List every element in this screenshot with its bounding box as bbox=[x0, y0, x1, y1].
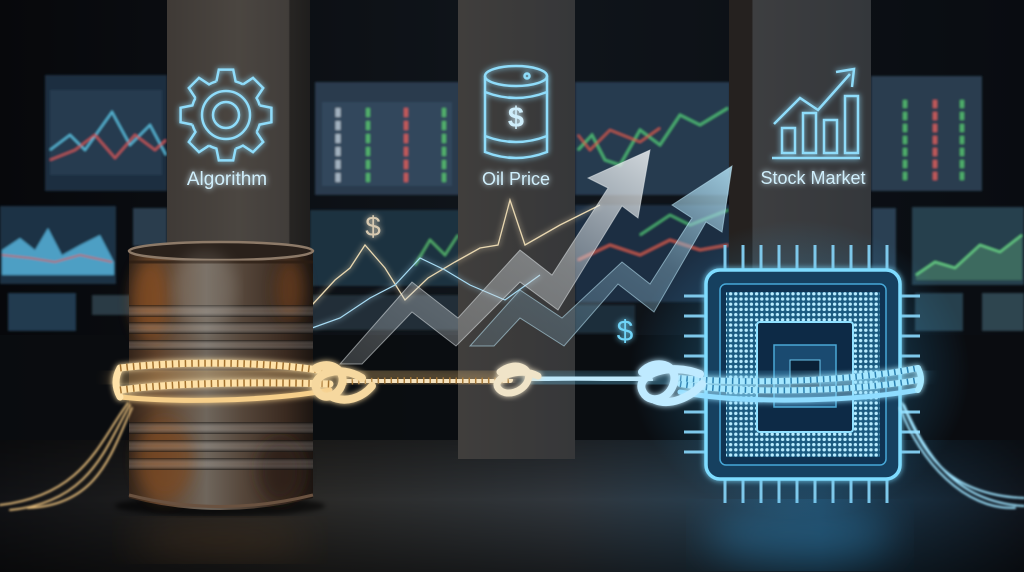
label: Algorithm: Algorithm bbox=[187, 169, 267, 190]
icon: gear with Algorithm label bbox=[181, 70, 271, 190]
chip body bbox=[706, 270, 900, 479]
icon: oil barrel with Oil Price label bbox=[482, 66, 550, 189]
panel: background market screens bbox=[0, 75, 1024, 333]
floor bbox=[0, 440, 1024, 572]
chart: thin price lines bbox=[312, 200, 600, 328]
left wraps bbox=[116, 363, 330, 400]
screen: middle centre left bbox=[310, 210, 460, 286]
shading band under screens bbox=[0, 335, 1024, 445]
chip core bbox=[757, 322, 853, 432]
icon: rising bars with Stock Market label bbox=[760, 69, 866, 188]
knot: left bbox=[316, 365, 372, 400]
screen: middle right small bbox=[872, 208, 896, 270]
floor reflection: barrel bbox=[130, 520, 310, 560]
arrow: blue rising arrow bbox=[470, 166, 732, 346]
dollar glyph: $ bbox=[508, 102, 524, 134]
screen: top right table bbox=[871, 76, 982, 191]
screen: middle left area chart bbox=[0, 206, 116, 284]
screens: lower small row bbox=[8, 293, 1024, 333]
arrow: white rising arrow bbox=[340, 150, 650, 364]
gear outline bbox=[181, 70, 271, 160]
barrel: rusty oil barrel bbox=[115, 242, 325, 516]
screen: middle right area chart bbox=[912, 207, 1024, 285]
knot: centre bbox=[497, 366, 538, 393]
icon: dollar sign lower: $ bbox=[617, 315, 634, 348]
left loose end strands bbox=[0, 403, 132, 510]
label: Oil Price: Oil Price bbox=[482, 169, 550, 189]
right wrap twist bbox=[680, 368, 918, 390]
screen: top centre table bbox=[315, 82, 460, 195]
right loose end strands bbox=[900, 403, 1024, 508]
rope glow bbox=[118, 372, 918, 383]
knot: right bbox=[641, 364, 702, 402]
rust patches bbox=[132, 260, 304, 502]
label: Stock Market: Stock Market bbox=[760, 168, 866, 188]
screen: top centre right chart bbox=[575, 82, 730, 195]
screen: middle centre right bbox=[575, 205, 730, 302]
chip: glowing AI processor bbox=[630, 220, 970, 520]
right wraps bbox=[680, 368, 921, 400]
chip pins bbox=[684, 245, 920, 503]
pillar: middle bbox=[458, 0, 575, 459]
floor reflection: chip bbox=[705, 505, 895, 565]
centre span bbox=[345, 380, 510, 382]
pillar: right bbox=[729, 0, 871, 300]
pillar: left bbox=[167, 0, 310, 270]
icon: dollar sign upper: $ bbox=[365, 211, 381, 242]
rope: tying barrel to chip bbox=[0, 363, 1024, 510]
screen: middle left small bbox=[133, 208, 167, 246]
centre twist bbox=[345, 380, 510, 382]
left wrap twist bbox=[120, 363, 330, 390]
screen: top left chart bbox=[45, 75, 167, 191]
dot grid bbox=[726, 292, 880, 457]
